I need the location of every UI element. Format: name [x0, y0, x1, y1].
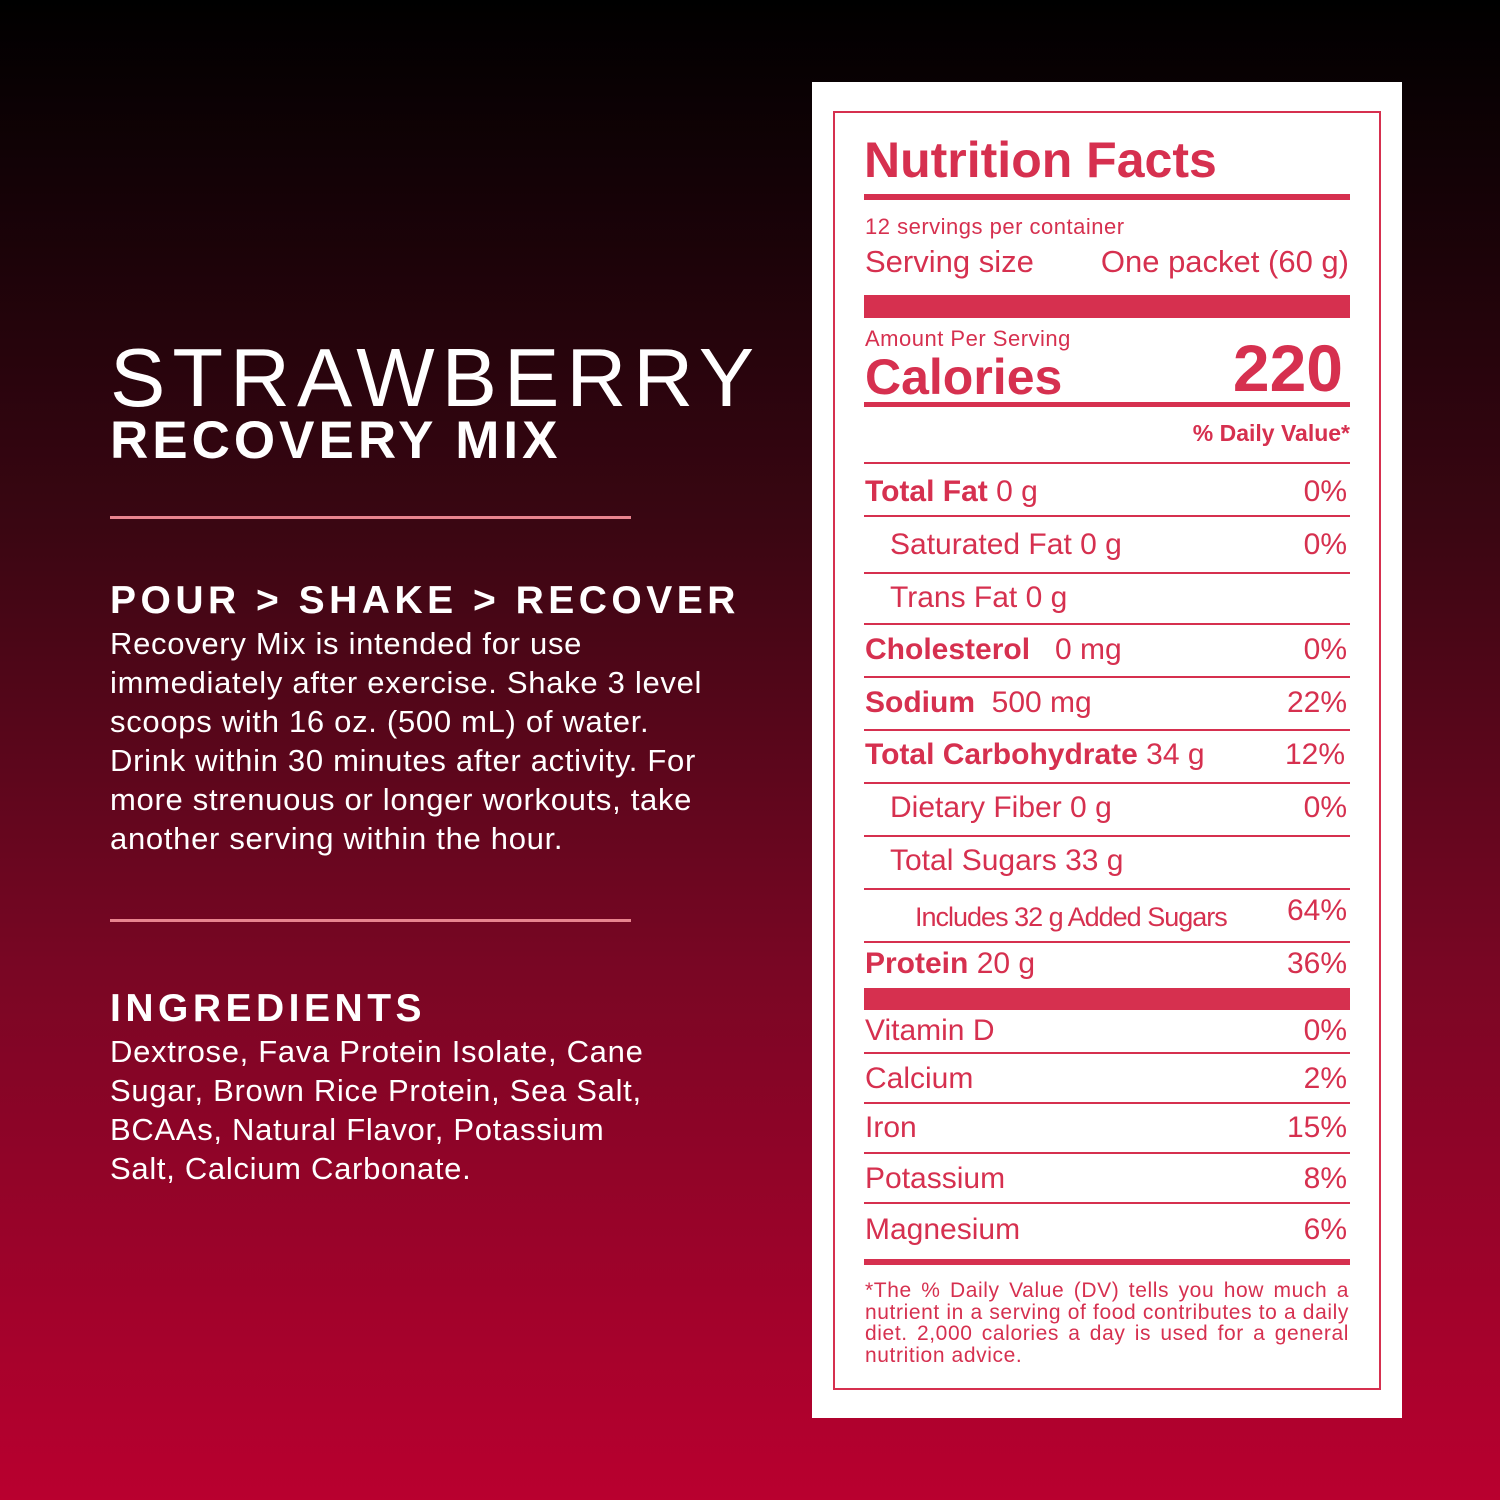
text: 15%: [1287, 1111, 1347, 1144]
text: Calcium: [865, 1062, 973, 1095]
panel: nutrition facts label: [812, 82, 1402, 1418]
text: Potassium: [865, 1162, 1005, 1195]
text: Protein 20 g: [865, 947, 1035, 980]
vitamins and minerals: 0%: [1304, 1014, 1347, 1047]
text: Includes 32 g Added Sugars: [915, 902, 1227, 932]
text: 6%: [1304, 1213, 1347, 1246]
nutrient rows: 0%: [1304, 475, 1347, 508]
text: Total Sugars 33 g: [890, 844, 1123, 877]
text: 0%: [1304, 791, 1347, 824]
section: directions: another serving within the hour.: [110, 821, 563, 856]
text: 0%: [1304, 633, 1347, 666]
section: directions: Recovery Mix is intended for use: [110, 626, 582, 661]
title: strawberry: STRAWBERRY: [110, 331, 761, 424]
text: Sodium 500 mg: [865, 686, 1092, 719]
footnote: *The % Daily Value (DV) tells you how much a nutrient in a serving of food contributes to a daily diet. 2,000 calories a day is used for a general nutrition advice.: [865, 1279, 1349, 1366]
heading: nutrition facts: Nutrition Facts: [864, 132, 1217, 188]
text: 0%: [1304, 528, 1347, 561]
text: Cholesterol 0 mg: [865, 633, 1122, 666]
text: Trans Fat 0 g: [890, 581, 1067, 614]
text: 12%: [1285, 738, 1345, 771]
section: directions: Drink within 30 minutes after activity. For: [110, 743, 696, 778]
text: 8%: [1304, 1162, 1347, 1195]
section: ingredients: Salt, Calcium Carbonate.: [110, 1151, 471, 1186]
subtitle: recovery mix: RECOVERY MIX: [110, 411, 561, 470]
section: directions: [110, 579, 740, 856]
section: directions: immediately after exercise. Shake 3 level: [110, 665, 702, 700]
serving size: Serving size: [865, 244, 1034, 279]
servings: 12 servings per container: [865, 214, 1125, 239]
section: directions: scoops with 16 oz. (500 mL) of water.: [110, 704, 649, 739]
nutrient rows: Total Fat 0 g: [865, 475, 1038, 508]
text: 22%: [1287, 686, 1347, 719]
section: directions: POUR > SHAKE > RECOVER: [110, 579, 740, 622]
text: 36%: [1287, 947, 1347, 980]
text: Dietary Fiber 0 g: [890, 791, 1112, 824]
nutrient rows: [865, 475, 1347, 508]
section: ingredients: [110, 987, 644, 1186]
section: ingredients: Dextrose, Fava Protein Isolate, Cane: [110, 1034, 644, 1069]
text: Magnesium: [865, 1213, 1020, 1246]
calories: 220: [1233, 331, 1343, 405]
serving size: One packet (60 g): [1101, 244, 1349, 279]
section: ingredients: Sugar, Brown Rice Protein, Sea Salt,: [110, 1073, 642, 1108]
serving size: [865, 244, 1349, 279]
text: Saturated Fat 0 g: [890, 528, 1122, 561]
section: ingredients: INGREDIENTS: [110, 987, 426, 1030]
vitamins and minerals: Vitamin D: [865, 1014, 994, 1047]
text: Iron: [865, 1111, 917, 1144]
section: directions: more strenuous or longer workouts, take: [110, 782, 692, 817]
section: ingredients: BCAAs, Natural Flavor, Potassium: [110, 1112, 604, 1147]
daily value header: % Daily Value*: [1193, 420, 1350, 446]
vitamins and minerals: [865, 1014, 1347, 1047]
text: 64%: [1287, 894, 1347, 927]
calories: Calories: [865, 349, 1062, 405]
text: Total Carbohydrate 34 g: [865, 738, 1205, 771]
calories: Amount Per Serving: [865, 326, 1071, 351]
text: 2%: [1304, 1062, 1347, 1095]
calories: [865, 326, 1343, 405]
